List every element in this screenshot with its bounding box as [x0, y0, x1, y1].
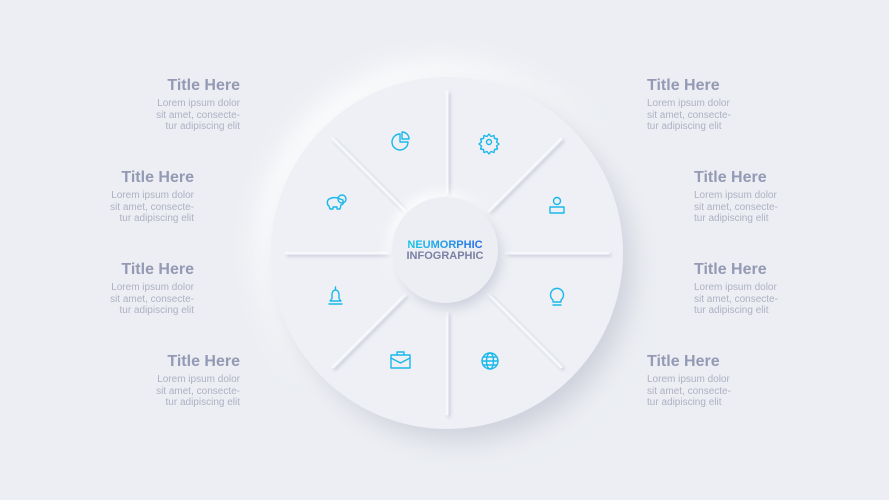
icon: bulb	[550, 288, 564, 305]
text: left bottom: Lorem ipsum dolor	[157, 374, 240, 385]
big circle	[271, 77, 623, 429]
text: left bottom: Title Here	[167, 353, 240, 370]
icon: person	[550, 198, 564, 213]
text: right mid-top: sit amet, consecte-	[694, 202, 778, 212]
icon: piggy bank	[327, 195, 346, 209]
text: right bottom: tur adipiscing elit	[647, 397, 721, 408]
dividers	[286, 92, 608, 414]
text: left bottom	[156, 353, 240, 408]
center circle: INFOGRAPHIC	[406, 250, 484, 262]
icons	[327, 132, 564, 369]
text: right mid-bottom: sit amet, consecte-	[694, 294, 778, 304]
text: left top: Title Here	[167, 77, 240, 94]
text: left mid-bottom: Lorem ipsum dolor	[111, 282, 194, 293]
text: right bottom: Title Here	[647, 353, 720, 370]
text: left mid-bottom	[110, 261, 194, 316]
text: left top: sit amet, consecte-	[156, 110, 240, 120]
text: right mid-bottom: Title Here	[694, 261, 767, 278]
text: right bottom	[647, 353, 731, 408]
text: left mid-bottom: Title Here	[121, 261, 194, 278]
text: right top: sit amet, consecte-	[647, 110, 731, 120]
text: right mid-bottom: Lorem ipsum dolor	[694, 282, 777, 293]
text: left mid-top	[110, 169, 194, 224]
text: right mid-top	[694, 169, 778, 224]
icon: pie chart	[392, 132, 409, 150]
icon: bell	[329, 287, 342, 304]
text: left mid-bottom: sit amet, consecte-	[110, 294, 194, 304]
text: left top: tur adipiscing elit	[166, 121, 240, 132]
text: left bottom: sit amet, consecte-	[156, 386, 240, 396]
text: right bottom: Lorem ipsum dolor	[647, 374, 730, 385]
center circle: NEUMORPHIC	[407, 239, 483, 251]
text: right bottom: sit amet, consecte-	[647, 386, 731, 396]
text: right top: Title Here	[647, 77, 720, 94]
text: left bottom: tur adipiscing elit	[166, 397, 240, 408]
text: left top	[156, 77, 240, 132]
text: left mid-top: Lorem ipsum dolor	[111, 190, 194, 201]
text: right mid-bottom	[694, 261, 778, 316]
icon: globe	[482, 353, 498, 369]
text: right mid-top: Title Here	[694, 169, 767, 186]
text: left mid-top: tur adipiscing elit	[120, 213, 194, 224]
text: left mid-bottom: tur adipiscing elit	[120, 305, 194, 316]
center circle	[392, 197, 498, 303]
text: left top: Lorem ipsum dolor	[157, 98, 240, 109]
text: right top	[647, 77, 731, 132]
icon: briefcase	[391, 352, 410, 368]
text: left mid-top: Title Here	[121, 169, 194, 186]
text: right mid-top: tur adipiscing elit	[694, 213, 768, 224]
icon: gear	[479, 134, 499, 154]
text: right mid-bottom: tur adipiscing elit	[694, 305, 768, 316]
text: right mid-top: Lorem ipsum dolor	[694, 190, 777, 201]
text: left mid-top: sit amet, consecte-	[110, 202, 194, 212]
text: right top: tur adipiscing elit	[647, 121, 721, 132]
text: right top: Lorem ipsum dolor	[647, 98, 730, 109]
